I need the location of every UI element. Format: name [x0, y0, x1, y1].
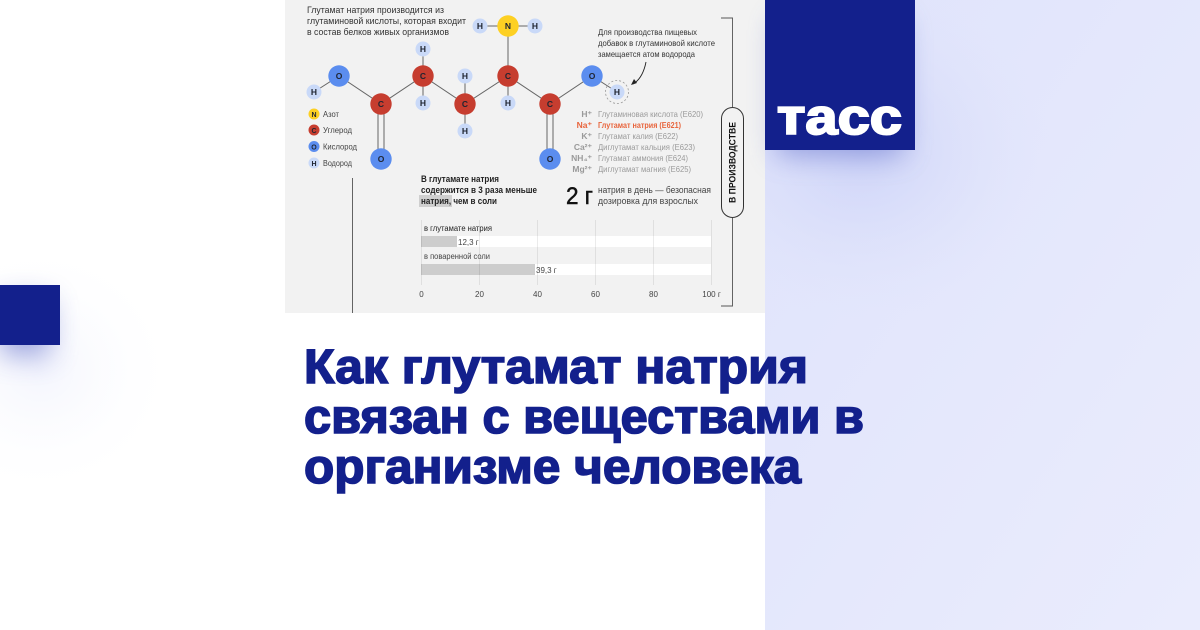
list: glutamate salts: Глутаминовая кислота (E620)	[598, 109, 703, 119]
legend: atoms: C	[311, 128, 317, 135]
intro text	[307, 5, 466, 37]
molecule diagram: N	[505, 21, 511, 31]
legend: atoms	[308, 108, 357, 168]
stat: 2 g per day: 2 г	[566, 183, 593, 210]
list: glutamate salts: Диглутамат кальция (E623)	[598, 142, 695, 152]
molecule diagram: C	[547, 99, 553, 109]
stat: 2 g per day: дозировка для взрослых	[598, 196, 698, 206]
headline: связан с веществами в	[304, 391, 864, 444]
intro text: глутаминовой кислоты, которая входит	[307, 16, 466, 26]
list: glutamate salts	[571, 109, 703, 174]
callout: three times less sodium: В глутамате натрия	[421, 174, 499, 184]
list: glutamate salts: H⁺	[581, 109, 593, 119]
molecule diagram: H	[420, 98, 426, 108]
molecule diagram: O	[589, 71, 596, 81]
stat: 2 g per day	[566, 183, 711, 210]
list: glutamate salts: Глутамат натрия (E621)	[598, 120, 681, 130]
molecule diagram: O	[378, 154, 385, 164]
molecule diagram: H	[420, 44, 426, 54]
bar chart: sodium content: 60	[591, 290, 600, 299]
background: left soft glow	[0, 240, 180, 500]
list: glutamate salts: NH₄⁺	[571, 153, 592, 163]
legend: atoms: N	[311, 112, 317, 119]
list: glutamate salts: Ca²⁺	[574, 142, 593, 152]
annotation: hydrogen replacement: Для производства пищевых	[598, 27, 698, 37]
headline	[304, 341, 864, 494]
annotation: hydrogen replacement	[598, 27, 715, 85]
legend: atoms: Водород	[323, 158, 352, 168]
list: glutamate salts: K⁺	[581, 131, 593, 141]
bar chart: sodium content: 40	[533, 290, 542, 299]
molecule diagram: C	[378, 99, 384, 109]
molecule diagram: O	[547, 154, 554, 164]
molecule diagram: H	[462, 126, 468, 136]
panel: right lavender background	[670, 0, 1200, 630]
bar chart: sodium content: 12,3 г	[458, 238, 479, 247]
headline: Как глутамат натрия	[304, 341, 808, 394]
bar chart: sodium content	[419, 220, 721, 299]
molecule diagram: H	[477, 21, 483, 31]
molecule diagram: H	[614, 87, 620, 97]
logo: TASS square	[765, 0, 915, 155]
molecule diagram: H	[462, 71, 468, 81]
list: glutamate salts: Диглутамат магния (E625)	[598, 164, 691, 174]
legend: atoms: Азот	[323, 109, 339, 119]
molecule diagram	[306, 15, 628, 170]
bar chart: sodium content: 100 г	[702, 290, 721, 299]
molecule diagram: H	[505, 98, 511, 108]
legend: atoms: Кислород	[323, 142, 357, 152]
logo: TASS square: тасс	[777, 89, 902, 145]
decorative blue square	[0, 285, 60, 355]
bar chart: sodium content: в поваренной соли	[424, 252, 490, 261]
bar chart: sodium content: 20	[475, 290, 484, 299]
list: glutamate salts: Na⁺	[577, 120, 593, 130]
bar chart: sodium content: 39,3 г	[536, 266, 557, 275]
stat: 2 g per day: натрия в день — безопасная	[598, 185, 711, 195]
intro text: в состав белков живых организмов	[307, 27, 449, 37]
bracket: in production	[352, 18, 744, 313]
molecule diagram: C	[462, 99, 468, 109]
legend: atoms: O	[311, 144, 317, 152]
annotation: hydrogen replacement: добавок в глутаминовой кислоте	[598, 38, 715, 48]
annotation: hydrogen replacement: замещается атом водорода	[598, 49, 695, 59]
molecule diagram: C	[420, 71, 426, 81]
list: glutamate salts: Глутамат калия (E622)	[598, 131, 678, 141]
molecule diagram: O	[336, 71, 343, 81]
callout: three times less sodium: натрия, чем в соли	[421, 196, 497, 206]
molecule diagram: H	[532, 21, 538, 31]
bar chart: sodium content: в глутамате натрия	[424, 224, 492, 233]
list: glutamate salts: Глутамат аммония (E624)	[598, 153, 688, 163]
molecule diagram: C	[505, 71, 511, 81]
panel: infographic crop	[285, 0, 765, 313]
list: glutamate salts: Mg²⁺	[572, 164, 593, 174]
callout: three times less sodium	[419, 174, 537, 207]
legend: atoms: H	[311, 161, 317, 168]
bracket: in production: В ПРОИЗВОДСТВЕ	[728, 122, 738, 203]
intro text: Глутамат натрия производится из	[307, 5, 444, 15]
molecule diagram: H	[311, 87, 317, 97]
bar chart: sodium content: 0	[419, 290, 424, 299]
bar chart: sodium content: 80	[649, 290, 658, 299]
headline: организме человека	[304, 441, 801, 494]
callout: three times less sodium: содержится в 3 раза меньше	[421, 185, 537, 195]
legend: atoms: Углерод	[323, 125, 352, 135]
